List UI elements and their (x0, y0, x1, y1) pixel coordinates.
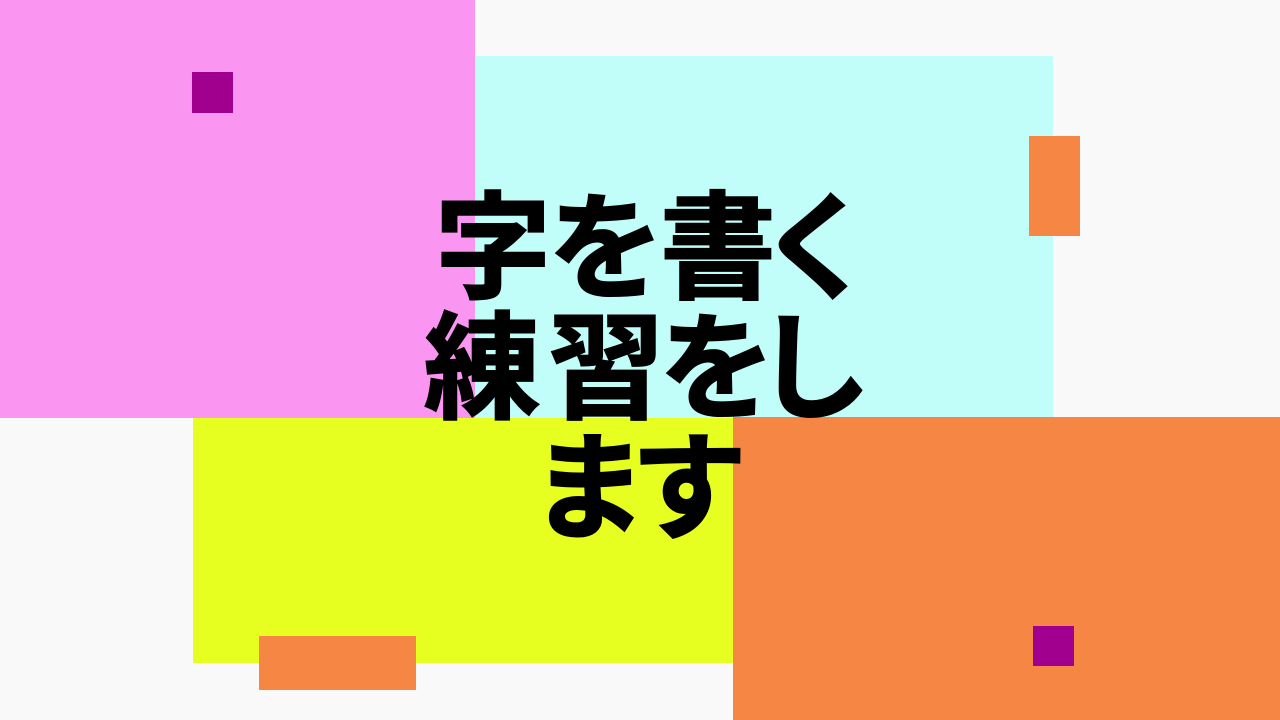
icon: orange block bottom (259, 636, 416, 690)
title: 字を書く (435, 184, 871, 314)
title: ます (531, 424, 743, 554)
icon: purple square bottom right (1033, 626, 1074, 666)
icon: orange block right (1029, 136, 1080, 236)
title (424, 184, 871, 554)
panel: orange rectangle (733, 417, 1280, 720)
panel: cyan rectangle (475, 56, 1053, 418)
title: 練習をし (424, 304, 867, 434)
panel: yellow rectangle (193, 418, 734, 663)
panel: pink rectangle (0, 0, 475, 418)
icon: purple square top left (192, 72, 233, 113)
